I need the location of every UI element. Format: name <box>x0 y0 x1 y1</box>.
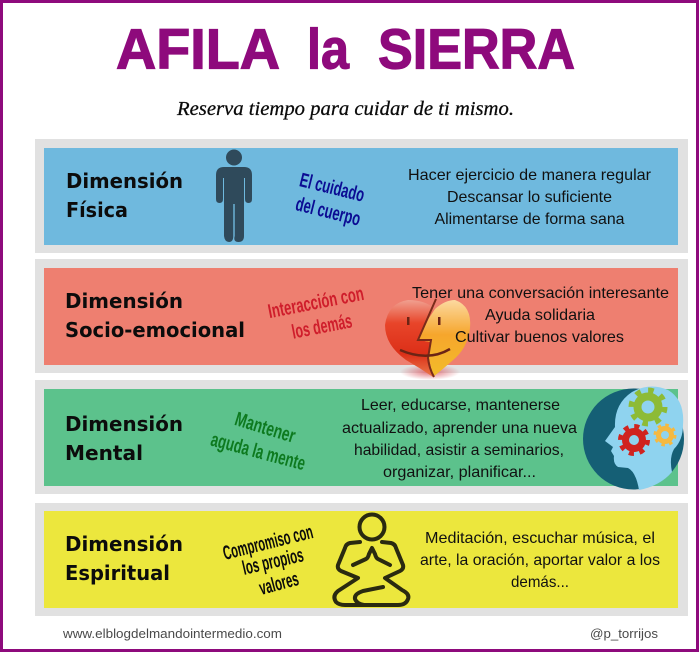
text: mental actions: organizar, planificar... <box>383 464 536 481</box>
text: socio-emotional actions: Ayuda solidaria <box>485 307 595 324</box>
heading: Dimensión Espiritual <box>65 532 183 585</box>
heading: Dimensión Física: Física <box>66 198 128 222</box>
heading: Dimensión Espiritual: Espiritual <box>65 561 170 585</box>
title: SIERRA <box>378 18 575 82</box>
icon: standing person <box>216 150 252 242</box>
footer: website: www.elblogdelmandointermedio.com <box>62 626 282 641</box>
label: Mantener aguda la mente <box>208 408 308 475</box>
face eyes <box>407 317 440 325</box>
title: la <box>307 18 350 82</box>
label: Mantener aguda la mente: Mantener <box>232 408 298 448</box>
heading: Dimensión Espiritual: Dimensión <box>65 532 183 556</box>
title <box>116 18 575 82</box>
heading: Dimensión Física <box>66 169 183 222</box>
label: Interacción con los demás: los demás <box>290 310 354 344</box>
panel: Dimensión Espiritual <box>35 503 688 616</box>
label: Compromiso con los propios valores: valores <box>257 568 301 600</box>
label: Interacción con los demás <box>266 283 366 344</box>
heading: Dimensión Mental: Mental <box>65 441 143 465</box>
icon: split heart face <box>385 299 470 380</box>
label: Mantener aguda la mente: aguda la mente <box>208 429 308 475</box>
heading: Dimensión Socio-emocional <box>65 289 245 342</box>
heading: Dimensión Socio-emocional: Socio-emocional <box>65 318 245 342</box>
text: spiritual actions: demás... <box>511 574 569 591</box>
icon: meditating figure <box>334 514 408 605</box>
text: mental actions <box>342 397 577 481</box>
panel: Dimensión Socio-emocional <box>35 259 688 373</box>
icon: orange gear <box>655 425 675 445</box>
heading: Dimensión Física: Dimensión <box>66 169 183 193</box>
text: physical actions: Hacer ejercicio de manera regular <box>408 167 652 184</box>
text: physical actions <box>408 167 652 228</box>
text: mental actions: Leer, educarse, mantenerse <box>361 397 560 414</box>
text: physical actions: Alimentarse de forma sana <box>434 211 625 228</box>
icon: red gear <box>620 426 648 454</box>
heading: Dimensión Mental: Dimensión <box>65 412 183 436</box>
title: AFILA <box>116 18 280 82</box>
label: Interacción con los demás: Interacción con <box>266 283 366 323</box>
text: physical actions: Descansar lo suficiente <box>447 189 612 206</box>
label: Compromiso con los propios valores: Compromiso con <box>221 521 315 565</box>
footer: handle: @p_torrijos <box>590 626 659 641</box>
text: socio-emotional actions: Tener una conversación interesante <box>412 285 669 302</box>
subtitle: Reserva tiempo para cuidar de ti mismo. <box>176 98 514 120</box>
label: El cuidado del cuerpo: del cuerpo <box>293 193 363 231</box>
text: socio-emotional actions <box>412 285 669 346</box>
panel: Dimensión Física <box>35 139 688 253</box>
text: mental actions: habilidad, asistir a seminarios, <box>354 442 564 459</box>
icon: green gear <box>632 390 664 424</box>
text: socio-emotional actions: Cultivar buenos valores <box>455 329 624 346</box>
label: El cuidado del cuerpo <box>293 169 367 231</box>
label: Compromiso con los propios valores <box>221 521 315 600</box>
text: mental actions: actualizado, aprender una nueva <box>342 420 577 437</box>
label: El cuidado del cuerpo: El cuidado <box>297 169 367 207</box>
panel: Dimensión Mental <box>35 380 688 494</box>
heading: Dimensión Socio-emocional: Dimensión <box>65 289 183 313</box>
text: spiritual actions: arte, la oración, aportar valor a los <box>420 552 660 569</box>
label: Compromiso con los propios valores: los propios <box>240 544 306 580</box>
icon: head with gears <box>583 386 684 490</box>
text: spiritual actions <box>420 530 660 591</box>
heading: Dimensión Mental <box>65 412 183 465</box>
text: spiritual actions: Meditación, escuchar música, el <box>425 530 655 547</box>
